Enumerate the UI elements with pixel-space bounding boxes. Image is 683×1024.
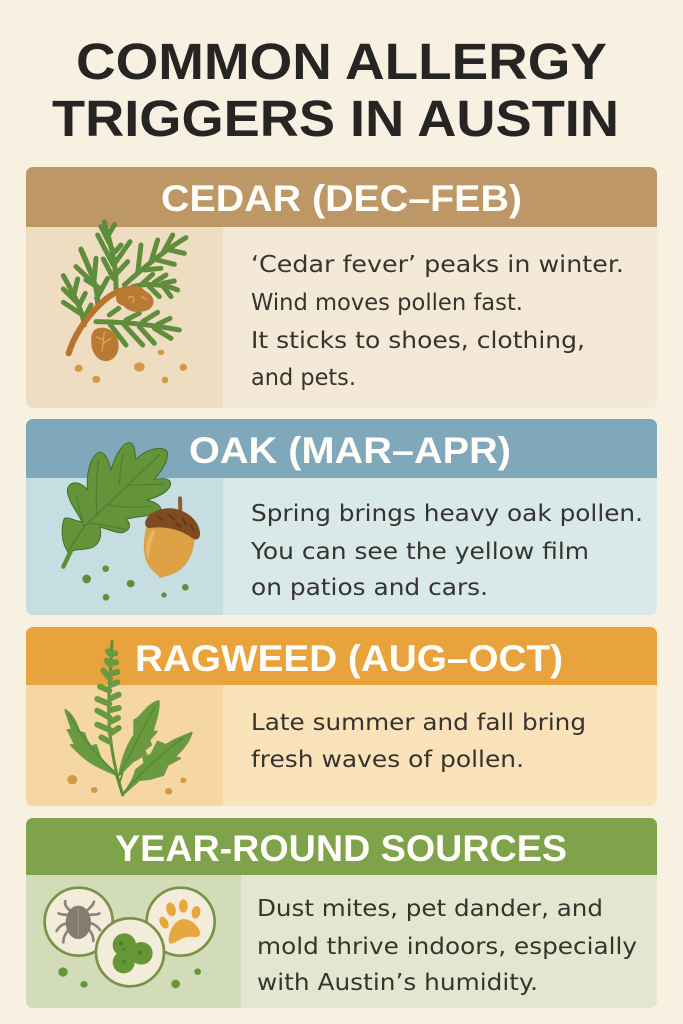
icon: cedar branch (63, 222, 187, 383)
ragweed header: RAGWEED (AUG–OCT) (135, 638, 563, 679)
icon: dust mite (45, 888, 113, 956)
ragweed header (26, 627, 657, 685)
oak header: OAK (MAR–APR) (189, 430, 511, 471)
panel: cedar (26, 167, 657, 408)
panel: year-round (26, 818, 657, 1008)
panel: oak (26, 419, 657, 615)
ragweed text: fresh waves of pollen. (251, 747, 524, 773)
icon: ragweed plant (65, 642, 192, 795)
title: TRIGGERS IN AUSTIN (52, 90, 619, 147)
icon: paw (147, 888, 215, 956)
oak text (250, 501, 643, 601)
cedar text (251, 252, 624, 391)
cedar header: CEDAR (DEC–FEB) (161, 178, 522, 219)
title (52, 33, 619, 147)
year-round text (257, 896, 637, 996)
cedar text: Wind moves pollen fast. (251, 290, 523, 316)
oak text: You can see the yellow film (250, 539, 589, 565)
ragweed text (251, 710, 586, 773)
cedar text: It sticks to shoes, clothing, (251, 328, 585, 354)
oak text: on patios and cars. (251, 575, 488, 601)
year-round text: Dust mites, pet dander, and (257, 896, 603, 922)
icon: dust mite, mold and paw (45, 888, 215, 988)
panel: ragweed (26, 627, 657, 806)
icon: oak leaf and acorn (62, 443, 200, 601)
year-round header (26, 818, 657, 875)
title: COMMON ALLERGY (76, 33, 607, 90)
ragweed text: Late summer and fall bring (251, 710, 586, 736)
year-round text: with Austin’s humidity. (257, 970, 538, 996)
cedar text: and pets. (251, 365, 356, 391)
oak text: Spring brings heavy oak pollen. (251, 501, 643, 527)
icon: mold (96, 918, 164, 986)
oak header (26, 419, 657, 478)
cedar text: ‘Cedar fever’ peaks in winter. (251, 252, 624, 278)
year-round text: mold thrive indoors, especially (257, 934, 637, 960)
cedar header (26, 167, 657, 227)
year-round header: YEAR-ROUND SOURCES (115, 828, 567, 869)
